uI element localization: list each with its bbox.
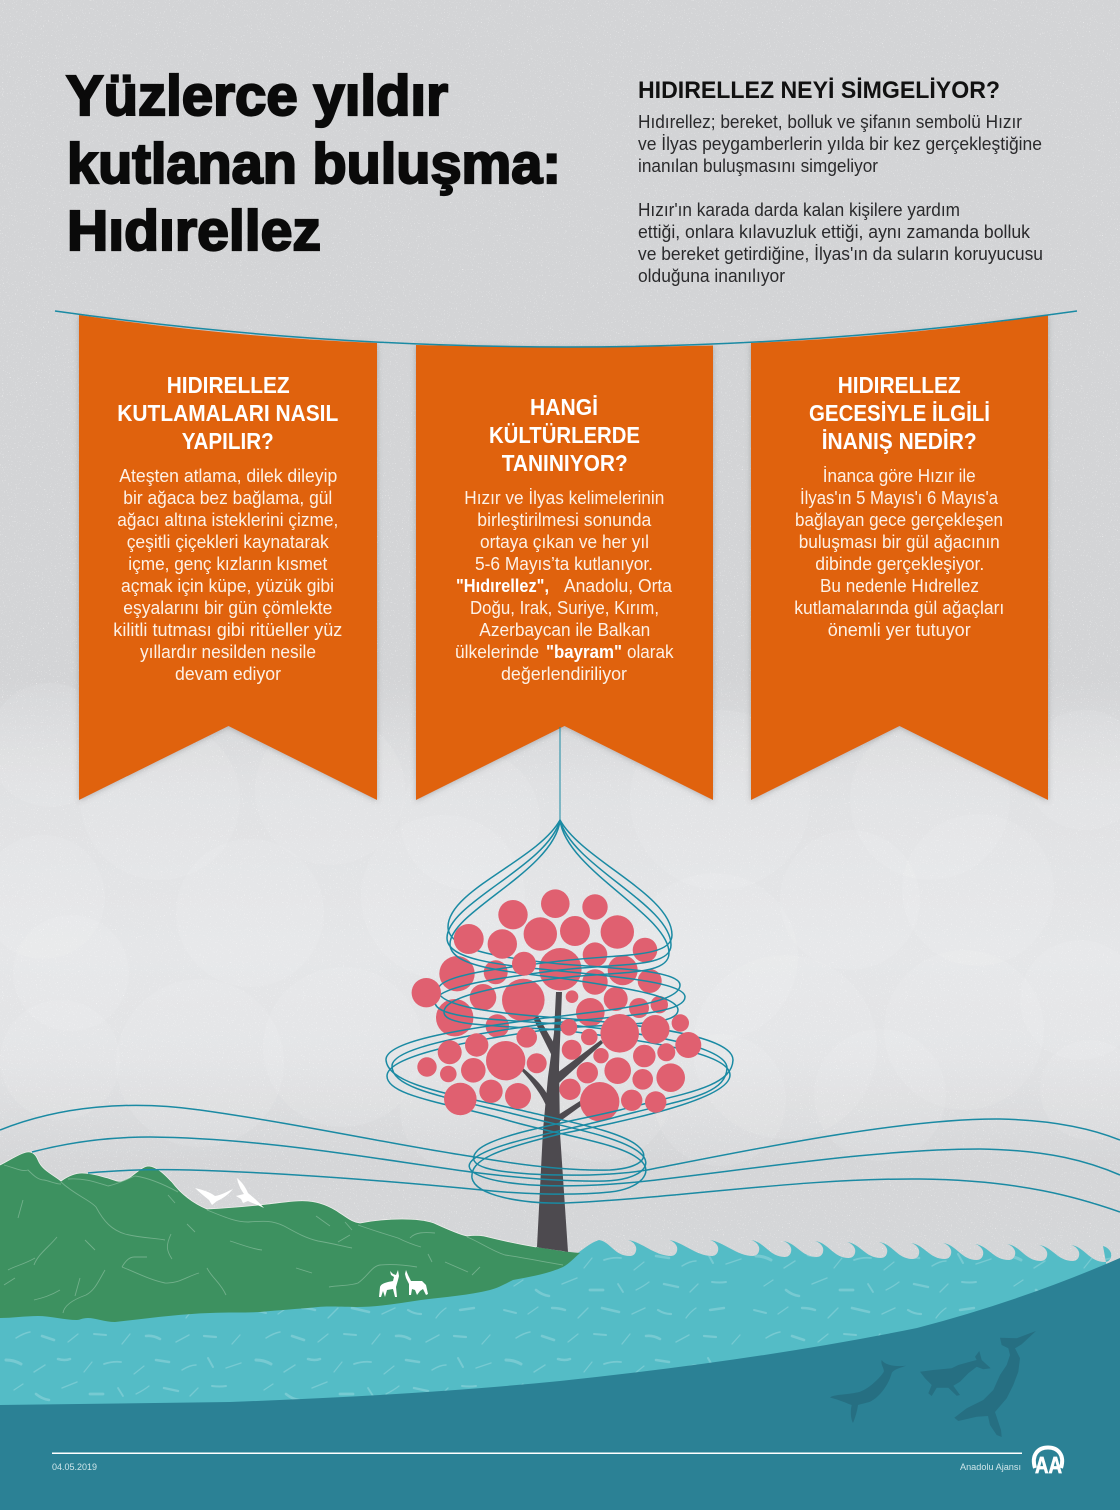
banner left body: eşyalarını bir gün çömlekte — [123, 598, 332, 618]
deer left — [379, 1270, 399, 1297]
blossoms in front of wires — [412, 889, 701, 1115]
banner right body: buluşması bir gül ağacının — [799, 532, 1000, 552]
banner shape centre — [416, 345, 713, 800]
banner right heading — [809, 372, 990, 454]
land top edge — [0, 1152, 536, 1247]
banner left body: Ateşten atlama, dilek dileyip — [119, 466, 337, 486]
intro paragraphs: olduğuna inanılıyor — [638, 266, 785, 286]
banner centre body: olarak — [627, 642, 674, 662]
banner left heading: HIDIRELLEZ — [167, 372, 290, 398]
banner left body: açmak için küpe, yüzük gibi — [121, 576, 334, 596]
logo: AA: AA — [1035, 1452, 1062, 1478]
panel: cultures — [416, 345, 713, 800]
deep water — [0, 1258, 1120, 1510]
banner centre body: Doğu, Irak, Suriye, Kırım, — [470, 598, 659, 618]
logo: AA — [1034, 1448, 1062, 1478]
title: Hıdırellez — [67, 199, 321, 263]
footer rule — [52, 1452, 1022, 1454]
water ripples — [0, 1240, 1120, 1420]
banner centre body: ortaya çıkan ve her yıl — [480, 532, 649, 552]
banner left body: devam ediyor — [175, 664, 281, 684]
intro paragraphs: Hıdırellez; bereket, bolluk ve şifanın sembolü Hızır — [638, 112, 1022, 132]
land ridge lines — [4, 1165, 563, 1313]
banner left body: kilitli tutması gibi ritüeller yüz — [113, 620, 342, 640]
banner left body: yıllardır nesilden nesile — [140, 642, 316, 662]
banner hanging wire — [55, 311, 1077, 347]
banner left body: içme, genç kızların kısmet — [128, 554, 327, 574]
banner left body: çeşitli çiçekleri kaynatarak — [127, 532, 330, 552]
banner centre heading: HANGİ — [530, 394, 598, 420]
banner centre body — [455, 488, 674, 684]
title — [66, 64, 561, 263]
banner centre heading: KÜLTÜRLERDE — [489, 422, 640, 448]
whale middle — [920, 1351, 991, 1396]
tree trunk and branches — [521, 992, 603, 1252]
intro text block — [638, 77, 1043, 286]
banner left heading: KUTLAMALARI NASIL — [117, 400, 338, 426]
shallow water — [0, 1240, 1120, 1420]
banner centre body: değerlendiriliyor — [501, 664, 627, 684]
panel: how celebrated — [79, 315, 377, 800]
banner right heading: İNANIŞ NEDİR? — [822, 428, 977, 454]
banner right body: dibinde gerçekleşiyor. — [815, 554, 984, 574]
title: Yüzlerce yıldır — [66, 64, 448, 128]
banner centre heading: TANINIYOR? — [502, 450, 628, 476]
intro paragraphs: Hızır'ın karada darda kalan kişilere yardım — [638, 200, 960, 220]
credit: Anadolu Ajansı — [960, 1462, 1021, 1472]
sea — [0, 1240, 1120, 1510]
banner shape left — [79, 315, 377, 800]
banner left body: bir ağaca bez bağlama, gül — [123, 488, 332, 508]
blossoms behind wires — [436, 938, 668, 1121]
banner right body: kutlamalarında gül ağaçları — [794, 598, 1004, 618]
banner centre body: 5-6 Mayıs’ta kutlanıyor. — [475, 554, 653, 574]
banner right heading: GECESİYLE İLGİLİ — [809, 400, 990, 426]
banner left heading — [117, 372, 338, 454]
banner left body: ağacı altına isteklerini çizme, — [117, 510, 338, 530]
whale left — [830, 1360, 906, 1423]
banner centre body: Hızır ve İlyas kelimelerinin — [464, 488, 664, 508]
whale right — [954, 1331, 1036, 1437]
banner right body: önemli yer tutuyor — [828, 620, 971, 640]
whales — [830, 1331, 1036, 1437]
banner centre body: ülkelerinde — [455, 642, 539, 662]
land: green hills — [0, 1152, 580, 1322]
spiral wires — [0, 727, 1120, 1212]
banner shape right — [751, 315, 1048, 800]
intro paragraphs — [638, 112, 1043, 286]
banner right body — [794, 466, 1004, 640]
banner right heading: HIDIRELLEZ — [838, 372, 961, 398]
deer — [379, 1270, 428, 1297]
date: 04.05.2019 — [52, 1462, 97, 1472]
intro heading: HIDIRELLEZ NEYİ SİMGELİYOR? — [638, 77, 1000, 104]
panel: belief — [751, 315, 1048, 800]
intro paragraphs: ve bereket getirdiğine, İlyas'ın da suların koruyucusu — [638, 244, 1043, 264]
bird right — [236, 1178, 264, 1208]
banner right body: İlyas'ın 5 Mayıs'ı 6 Mayıs'a — [800, 488, 999, 508]
banner centre body: Azerbaycan ile Balkan — [479, 620, 650, 640]
banner centre body: "Hıdırellez", — [456, 576, 549, 596]
banner right body: İnanca göre Hızır ile — [823, 466, 976, 486]
intro paragraphs: ettiği, onlara kılavuzluk ettiği, aynı zamanda bolluk — [638, 222, 1031, 242]
birds — [195, 1178, 264, 1208]
banner centre body: "bayram" — [546, 642, 622, 662]
tree — [0, 727, 1120, 1252]
title: kutlanan buluşma: — [67, 132, 561, 196]
intro paragraphs: inanılan buluşmasını simgeliyor — [638, 156, 878, 176]
banner centre body: Anadolu, Orta — [564, 576, 673, 596]
banner left heading: YAPILIR? — [182, 428, 274, 454]
bird left — [195, 1188, 233, 1205]
deer right — [405, 1270, 428, 1295]
banner centre body: birleştirilmesi sonunda — [477, 510, 652, 530]
footer — [52, 1448, 1062, 1478]
intro paragraphs: ve İlyas peygamberlerin yılda bir kez gerçekleştiğine — [638, 134, 1042, 154]
banner left body — [113, 466, 342, 684]
banner centre heading — [489, 394, 640, 476]
banner right body: bağlayan gece gerçekleşen — [795, 510, 1003, 530]
banner right body: Bu nedenle Hıdrellez — [820, 576, 979, 596]
